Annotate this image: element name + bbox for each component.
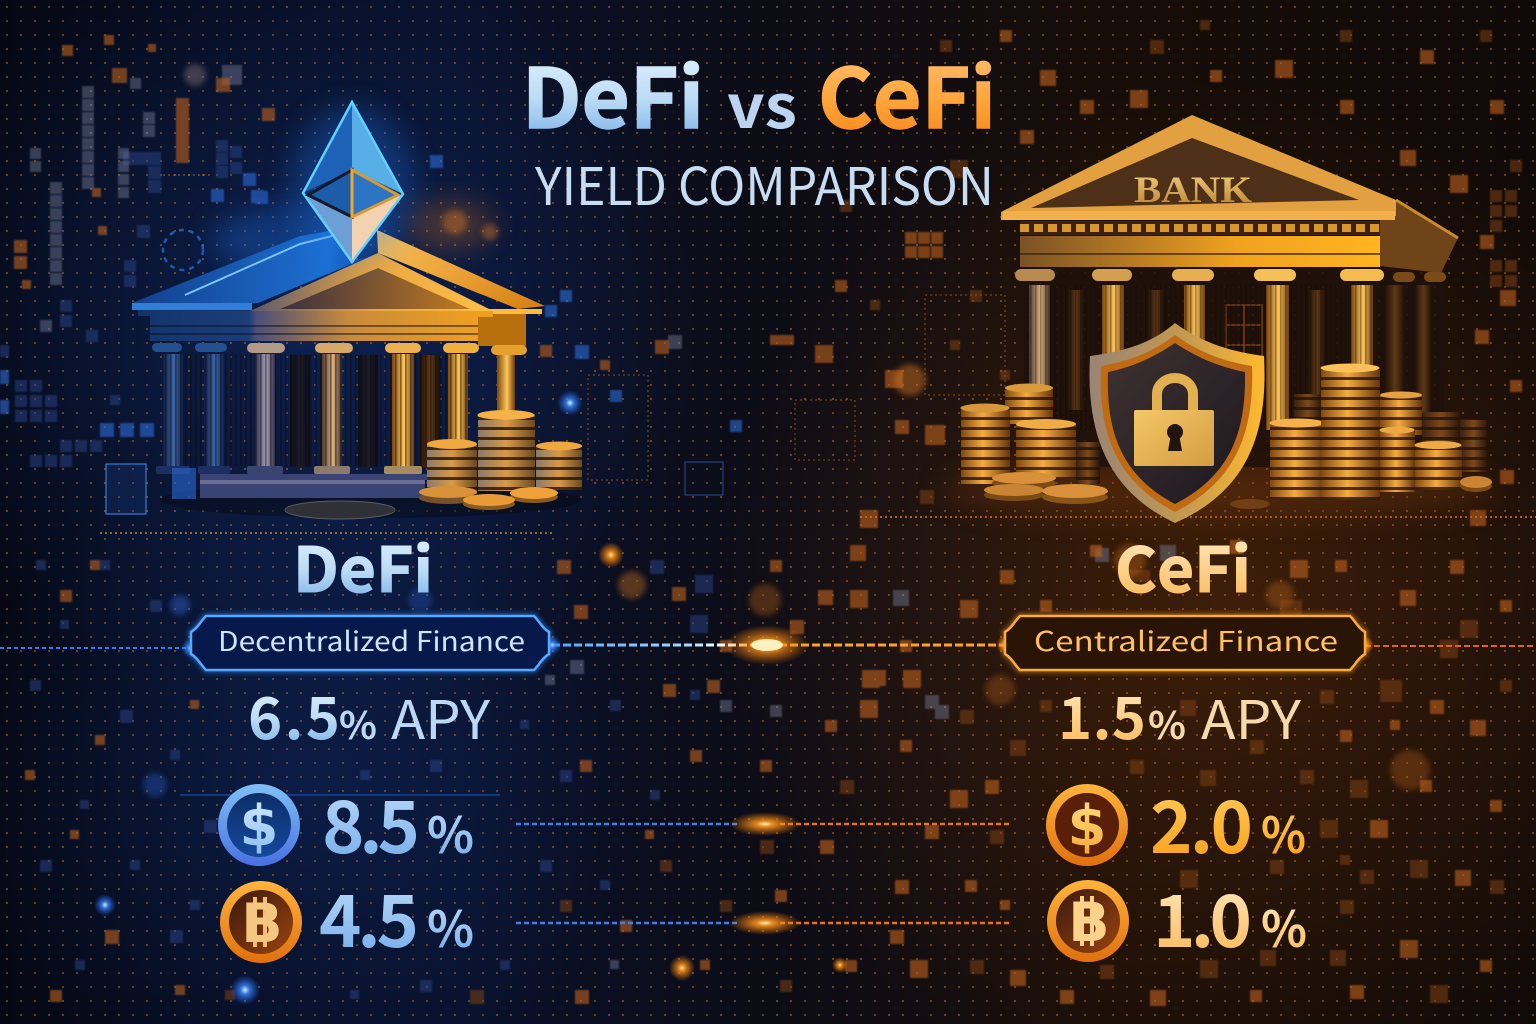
heading DeFi: DeFi [293,520,433,610]
shield [1089,323,1265,523]
DeFi APY [248,672,491,756]
CeFi bank illustration [940,115,1500,523]
CeFi APY: 1.5 [1058,672,1146,756]
soft bokeh lights [143,64,1430,797]
blue roof slab [132,230,378,303]
heading CeFi: CeFi [1115,520,1251,610]
stablecoin row: 2.0 [1150,769,1253,874]
pill: Decentralized Finance [191,616,549,670]
dark back columns [290,355,440,467]
floor medallion [285,501,395,519]
columns [163,354,515,466]
CeFi APY [1058,672,1302,756]
coin: bitcoin [220,881,302,963]
bitcoin row: % [1261,890,1307,962]
coin: bitcoin: B [241,892,283,955]
pill: Centralized Finance: Centralized Finance [1034,620,1338,659]
DeFi APY: 6.5 [248,672,340,756]
pediment [250,253,493,311]
coin stacks right [1230,364,1492,509]
side wall [1380,200,1458,273]
cornice strip [132,303,252,310]
BANK sign: BANK [1134,170,1252,211]
temple steps [200,474,430,498]
pill: Decentralized Finance: Decentralized Finance [218,620,525,659]
bank interior [1024,267,1444,467]
gold ember glow [406,201,494,249]
pediment [1001,115,1396,220]
CeFi column [1005,520,1365,968]
frieze [1020,236,1380,267]
scattered data squares: blue and grey [0,65,1176,999]
dark back columns [1068,285,1432,415]
coin: bitcoin [1047,880,1129,962]
CeFi APY: % [1148,695,1186,750]
capitals [152,343,527,355]
Ethereum diamond [290,102,414,263]
capitals [1015,269,1446,282]
stablecoin row: 8.5 [322,769,420,874]
stablecoin row [218,769,474,874]
stablecoin row [1046,769,1306,874]
bitcoin row [1047,863,1307,968]
title [522,33,996,220]
connector: stablecoin row [516,812,1012,836]
main horizontal divider line [0,625,1536,665]
glow behind temple [210,206,390,274]
floor shadow [160,482,580,518]
entablature [150,311,493,317]
window grid [1226,305,1262,365]
dashed ring [163,230,203,270]
CeFi APY: APY [1201,679,1302,755]
coin stacks [419,410,582,510]
tympanum [1031,138,1359,208]
stablecoin row: % [1261,796,1306,868]
column bases [156,466,422,474]
cornice [1003,211,1395,220]
connector: bitcoin row [516,911,1010,935]
dentils [1020,221,1380,235]
title word: CeFi: CeFi [818,33,996,152]
bitcoin row: 4.5 [319,863,419,968]
stablecoin row: % [427,796,474,868]
coin: bitcoin: B [1068,891,1110,954]
coin: dollar [218,784,300,866]
dashed frame accents [100,175,1536,533]
DeFi temple illustration [132,102,582,519]
padlock [1134,378,1214,466]
columns [1029,285,1373,430]
roof highlight [185,236,332,295]
right roof [377,230,545,309]
bitcoin row: 1.0 [1153,863,1252,968]
coin stacks left [960,384,1108,504]
coin: dollar [1046,784,1128,866]
DeFi APY: APY [391,679,491,755]
side roof edge [1396,200,1458,238]
blue hologram cube [106,464,196,514]
bitcoin row [220,863,474,968]
pill: Centralized Finance [1005,616,1365,670]
subtitle: YIELD COMPARISON [534,145,994,220]
sparkles [94,390,848,1005]
bank floor glow [940,460,1500,520]
coin: dollar: $ [240,794,278,859]
title word: vs: vs [727,59,797,146]
faint blue scan line [180,794,500,796]
title word: DeFi: DeFi [522,33,704,152]
coin: dollar: $ [1068,794,1106,859]
DeFi column [191,520,549,968]
right wing entablature [478,309,542,314]
DeFi APY: % [339,695,377,750]
tympanum [280,268,470,309]
bitcoin row: % [427,890,474,962]
